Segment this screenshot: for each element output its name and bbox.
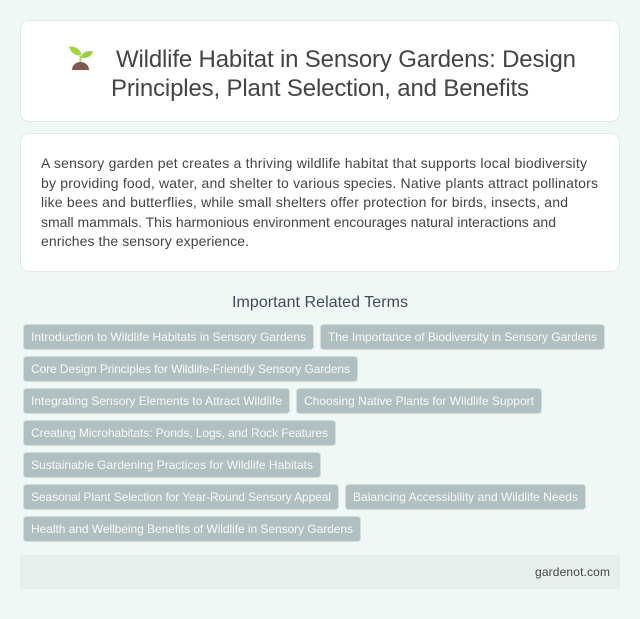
chip: native plants: Choosing Native Plants for Wildlife Support xyxy=(304,394,535,408)
title text xyxy=(111,46,576,102)
chip: sensory elements: Integrating Sensory Elements to Attract Wildlife xyxy=(31,394,282,408)
title text: Wildlife Habitat in Sensory Gardens: Design xyxy=(116,46,576,73)
description text: like bees and butterflies, while small shelters offer protection for birds, insects, and xyxy=(41,194,568,210)
chip: seasonal selection xyxy=(24,484,338,510)
chip: core design: Core Design Principles for Wildlife-Friendly Sensory Gardens xyxy=(31,362,350,376)
chip: accessibility xyxy=(346,484,586,510)
chip: introduction: Introduction to Wildlife Habitats in Sensory Gardens xyxy=(31,330,306,344)
related terms chips xyxy=(24,324,604,542)
description text: A sensory garden pet creates a thriving wildlife habitat that supports local biodiversity xyxy=(41,155,587,171)
heading: related terms: Important Related Terms xyxy=(232,294,408,311)
chip: introduction xyxy=(24,324,314,350)
chip: native plants xyxy=(296,388,542,414)
chip: biodiversity xyxy=(320,324,604,350)
footer xyxy=(20,555,620,589)
chip: microhabitats xyxy=(24,420,336,446)
description text xyxy=(41,155,598,249)
chip: seasonal selection: Seasonal Plant Selection for Year-Round Sensory Appeal xyxy=(31,490,331,504)
title text: Principles, Plant Selection, and Benefits xyxy=(111,75,529,102)
footer: gardenot.com xyxy=(535,565,610,579)
chip: health benefits: Health and Wellbeing Benefits of Wildlife in Sensory Gardens xyxy=(31,522,353,536)
chip: sensory elements xyxy=(24,388,290,414)
chip: health benefits xyxy=(24,516,360,542)
description text: small mammals. This harmonious environment encourages natural interactions and xyxy=(41,214,556,230)
chip: microhabitats: Creating Microhabitats: Ponds, Logs, and Rock Features xyxy=(31,426,328,440)
icon: seedling xyxy=(69,46,93,70)
chip: core design xyxy=(24,356,358,382)
panel: description xyxy=(20,134,620,272)
description text: enriches the sensory experience. xyxy=(41,233,249,249)
chip: accessibility: Balancing Accessibility and Wildlife Needs xyxy=(353,490,578,504)
chip: sustainable practices: Sustainable Gardening Practices for Wildlife Habitats xyxy=(31,458,313,472)
description text: by providing food, water, and shelter to various species. Native plants attract pollinators xyxy=(41,175,598,191)
chip: sustainable practices xyxy=(24,452,320,478)
panel: title card xyxy=(20,20,620,122)
chip: biodiversity: The Importance of Biodiversity in Sensory Gardens xyxy=(328,330,597,344)
